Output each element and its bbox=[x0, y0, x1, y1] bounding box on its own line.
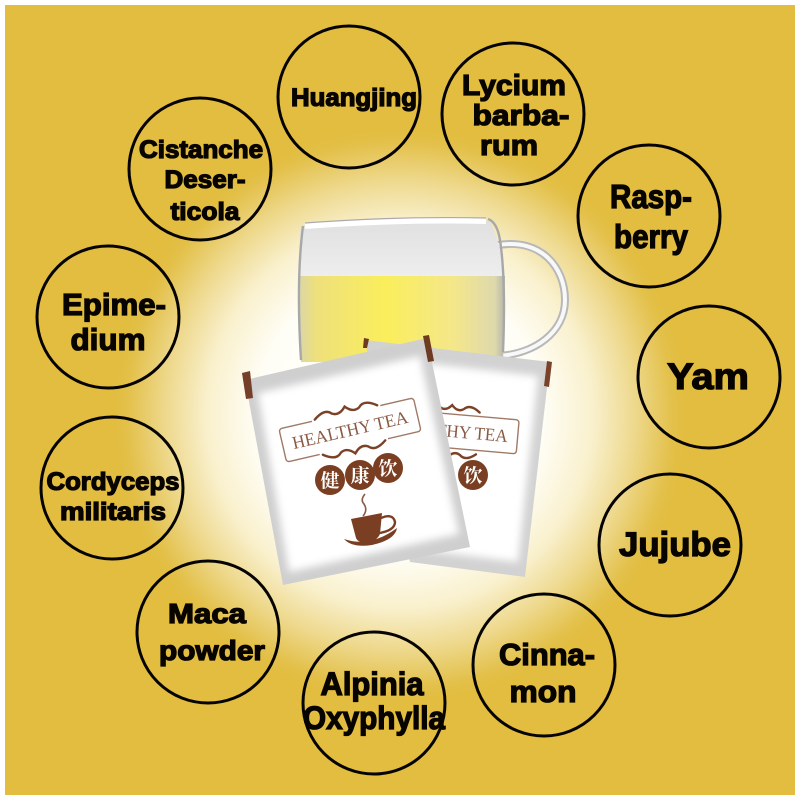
ingredient: Cistanche Deserticola: ticola bbox=[170, 198, 241, 226]
ingredient: Cinnamon: Cinna- bbox=[499, 637, 595, 672]
ingredient: Alpinia Oxyphylla: Oxyphylla bbox=[303, 700, 445, 736]
packet characters: 健 bbox=[320, 470, 340, 492]
ingredient: Cistanche Deserticola: Cistanche bbox=[139, 136, 263, 164]
ingredient: Cinnamon bbox=[473, 594, 615, 736]
ingredient: Jujube: Jujube bbox=[619, 526, 731, 564]
ingredient: Cistanche Deserticola bbox=[129, 98, 271, 240]
packet characters bbox=[458, 460, 488, 490]
mug tea liquid bbox=[299, 276, 505, 362]
ingredient: Alpinia Oxyphylla: Alpinia bbox=[320, 666, 424, 702]
ingredient: Lycium barbarum: Lycium bbox=[462, 70, 566, 102]
ingredient: Alpinia Oxyphylla bbox=[303, 632, 445, 774]
ingredient: Yam bbox=[638, 306, 780, 448]
icon: steaming coffee cup bbox=[344, 494, 397, 546]
packet characters: 饮 bbox=[378, 458, 398, 480]
tea packet: back: 饮 bbox=[463, 465, 483, 487]
mug air space bbox=[299, 221, 505, 277]
ingredient: Huangjing: Huangjing bbox=[291, 84, 417, 112]
ingredient: Maca powder bbox=[137, 561, 279, 703]
ingredient: Jujube bbox=[599, 474, 741, 616]
packet label: HEALTHY TEA bbox=[391, 416, 509, 446]
ingredient: Lycium barbarum: rum bbox=[480, 130, 538, 162]
ingredient: Cordyceps militaris: Cordyceps bbox=[46, 468, 180, 496]
ingredient: Raspberry bbox=[578, 145, 720, 287]
packet label bbox=[380, 399, 520, 463]
ingredient: Cordyceps militaris bbox=[41, 417, 183, 559]
ingredient: Raspberry: berry bbox=[614, 218, 689, 255]
packet label: HEALTHY TEA bbox=[290, 407, 410, 453]
mug rim and walls bbox=[299, 219, 504, 360]
tea packet: back bbox=[363, 338, 552, 577]
ingredient: Epimedium: Epime- bbox=[62, 287, 166, 322]
packet tear strips bbox=[363, 338, 369, 348]
packet characters: 康 bbox=[350, 464, 370, 487]
ingredient: Raspberry: Rasp- bbox=[610, 178, 692, 215]
tea packet: front bbox=[242, 335, 470, 585]
ingredient: Maca powder: powder bbox=[159, 635, 265, 666]
ingredient: Maca powder: Maca bbox=[168, 598, 246, 629]
ingredient: Lycium barbarum bbox=[442, 43, 584, 185]
ingredient: Epimedium: dium bbox=[70, 322, 146, 357]
ingredient: Lycium barbarum: barba- bbox=[472, 100, 570, 132]
ingredient: Cordyceps militaris: militaris bbox=[60, 498, 166, 526]
ingredient: Cinnamon: mon bbox=[510, 674, 576, 709]
ingredient: Huangjing bbox=[278, 26, 420, 168]
packet characters bbox=[315, 453, 403, 495]
packet tear strips bbox=[242, 371, 253, 399]
ingredient: Yam: Yam bbox=[667, 356, 749, 397]
icon: glass tea mug bbox=[299, 218, 565, 362]
mug handle bbox=[498, 244, 565, 356]
ingredient: Epimedium bbox=[37, 246, 179, 388]
ingredient: Cistanche Deserticola: Deser- bbox=[164, 166, 246, 194]
packet label bbox=[277, 391, 423, 469]
